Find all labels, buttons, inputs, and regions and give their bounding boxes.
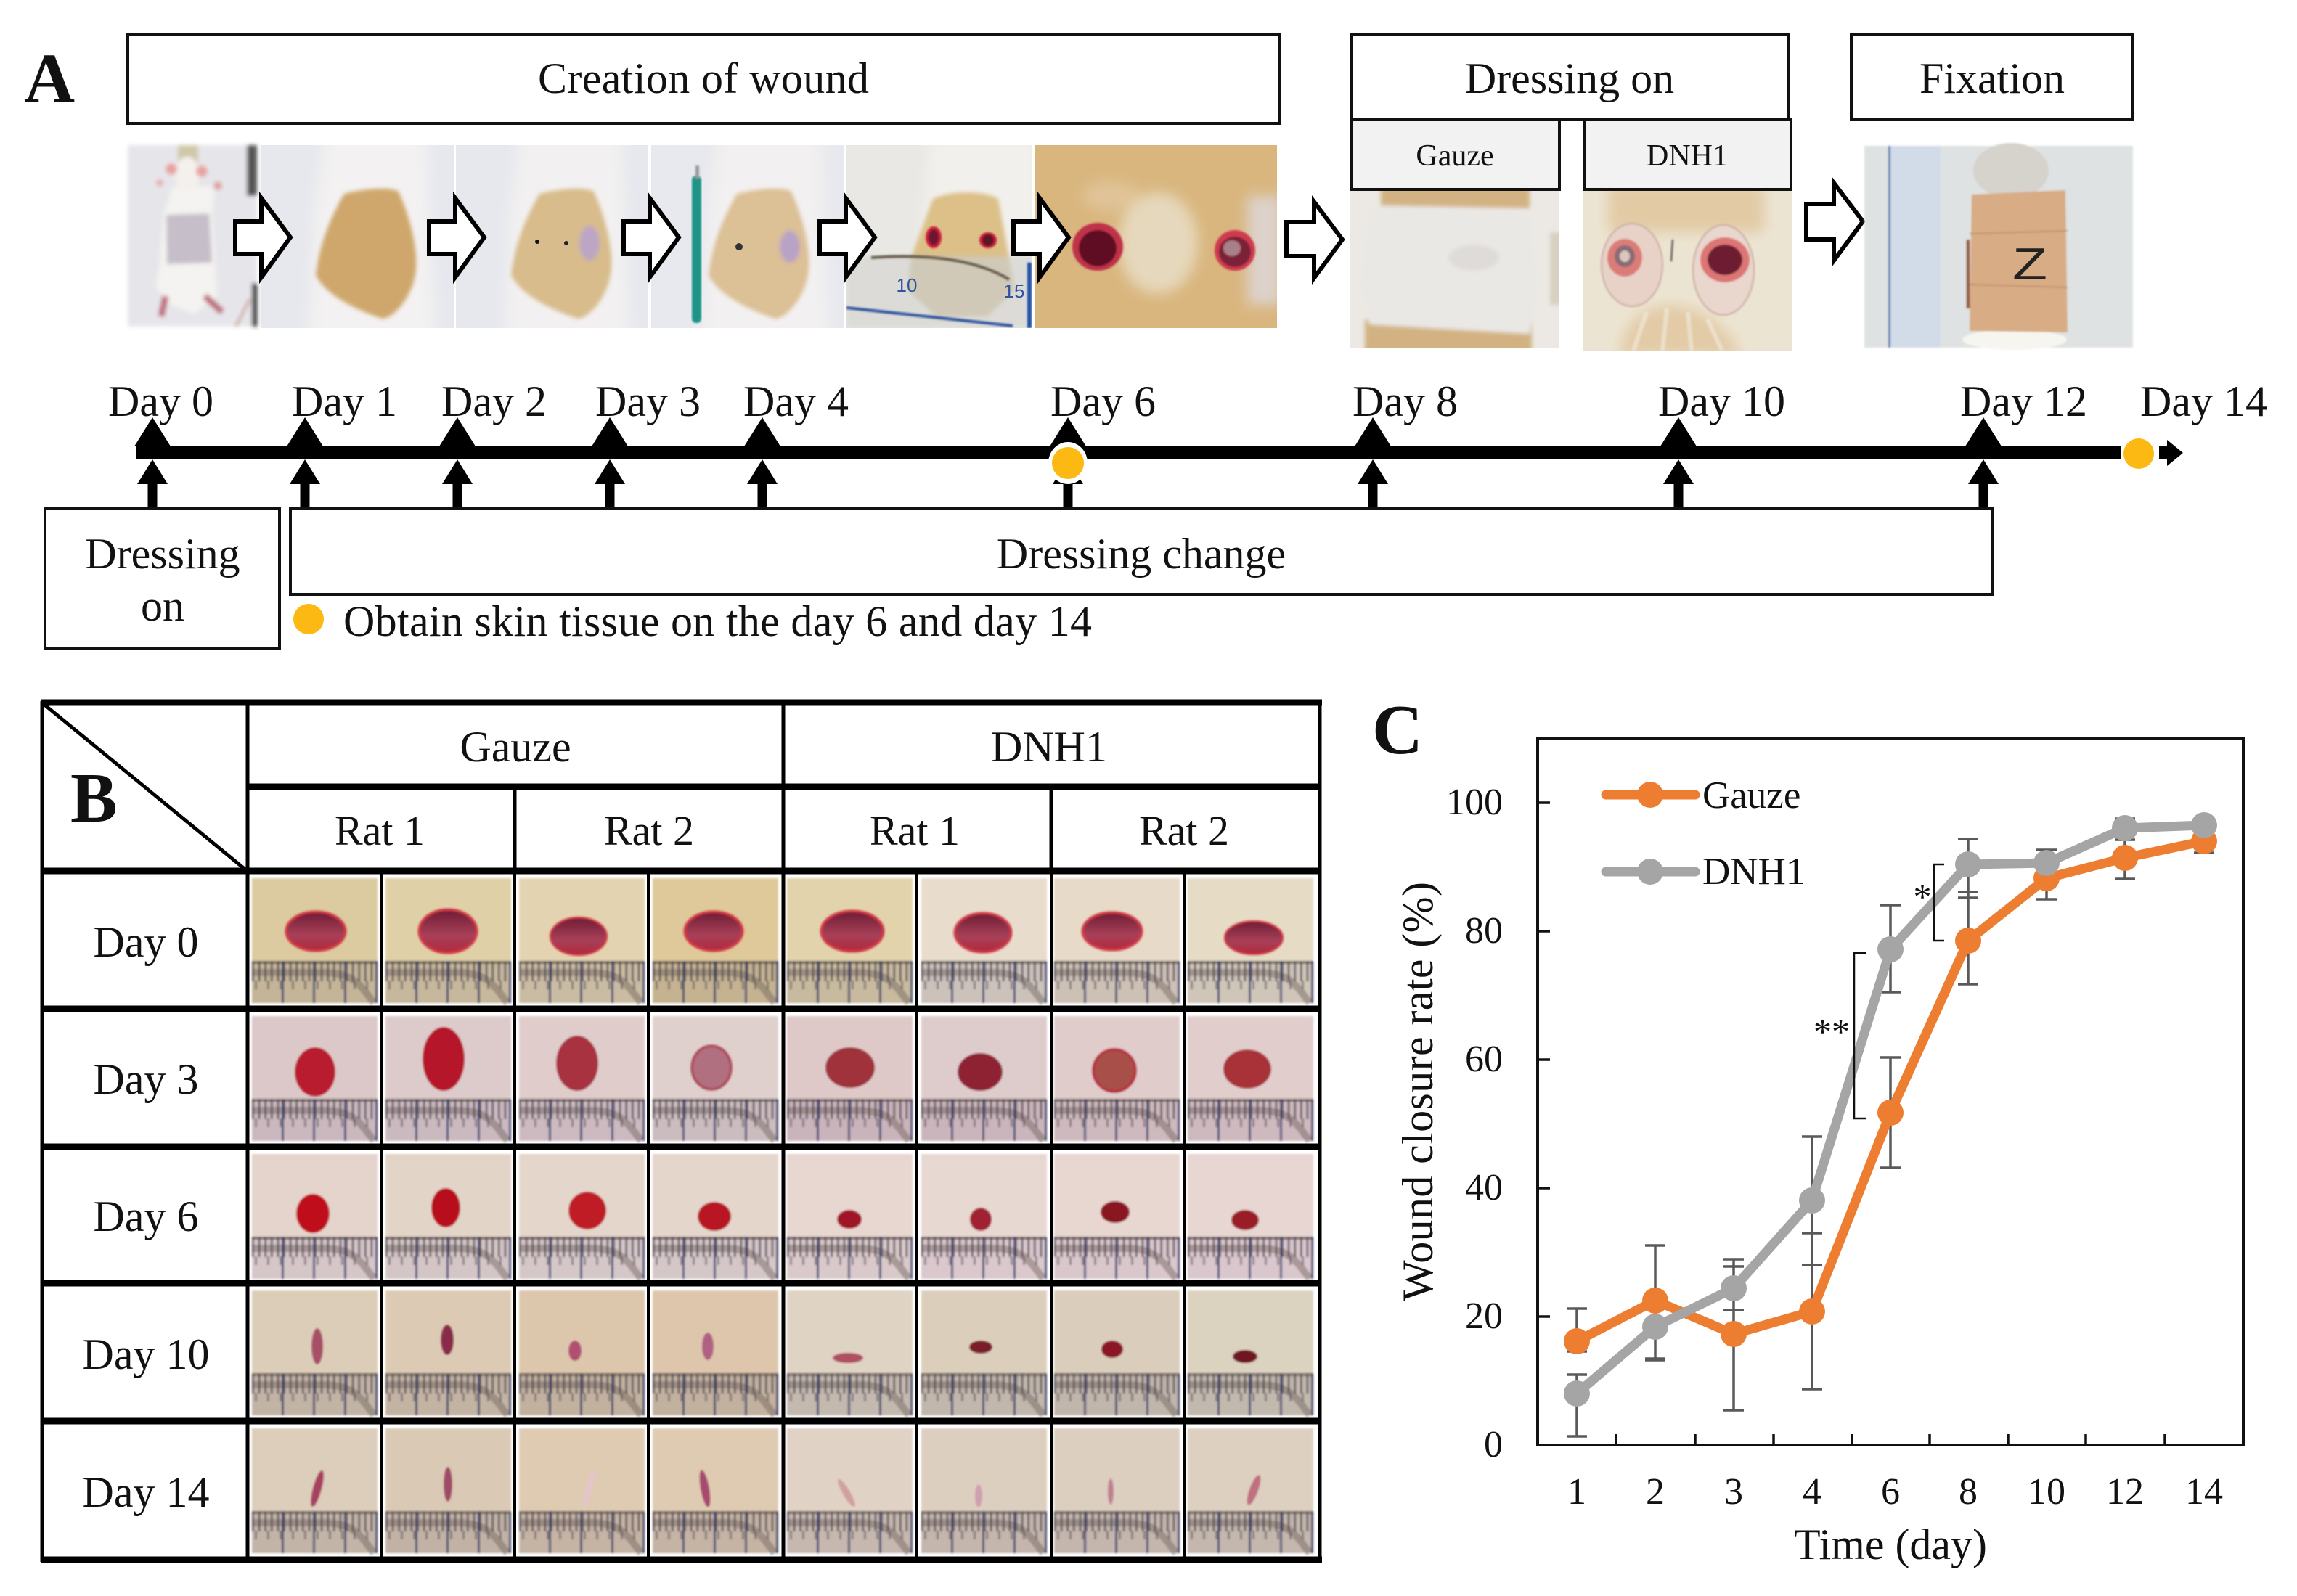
photo: Gauze Rat 2 right Day 14: [653, 1428, 778, 1553]
series: DNH1: [1564, 812, 2217, 1407]
photo: Gauze Rat 2 right Day 10: [653, 1290, 778, 1415]
photos: row Day 6: [252, 1154, 1313, 1279]
x axis labels: 14: [2185, 1471, 2223, 1513]
photo: DNH1 Rat 2 left Day 0: [1054, 878, 1180, 1003]
photo: DNH1 Rat 2 left Day 6: [1054, 1154, 1180, 1279]
panel: C wound closure line chart: [1372, 691, 2243, 1568]
photo: DNH1 Rat 2 right Day 14: [1188, 1428, 1313, 1553]
x axis labels: [1567, 1471, 2223, 1513]
panel: B wound photo table: [41, 701, 1322, 1562]
table header: rats: [335, 807, 1229, 854]
sub heading: DNH1: [1584, 120, 1791, 189]
photos: row Day 3: [252, 1016, 1313, 1141]
photo: Gauze Rat 2 right Day 3: [653, 1016, 778, 1141]
photo: DNH1 Rat 2 right Day 0: [1188, 878, 1313, 1003]
legend: tissue collection: Obtain skin tissue on the day 6 and day 14: [343, 597, 1092, 645]
timeline day labels: [108, 377, 2267, 425]
photo: biopsy punch on marked back: [651, 145, 844, 328]
photo: fixation bandage: [1864, 143, 2133, 350]
photo: Gauze Rat 2 right Day 6: [653, 1154, 778, 1279]
photo: wounds measured with ruler: [846, 138, 1038, 328]
photos: row Day 14: [252, 1428, 1313, 1553]
significance bracket: *: [1914, 864, 1944, 941]
photo: Gauze Rat 2 left Day 10: [519, 1290, 645, 1415]
sub heading: DNH1: DNH1: [1647, 139, 1728, 173]
table header: rats: Rat 1: [870, 807, 960, 854]
photo: DNH1 Rat 2 right Day 6: [1188, 1154, 1313, 1279]
x axis labels: 12: [2106, 1471, 2144, 1513]
photo: Gauze Rat 1 left Day 0: [252, 878, 378, 1003]
x axis labels: 1: [1567, 1471, 1586, 1513]
panel label C: C: [1372, 691, 1423, 769]
photo: Gauze Rat 1 right Day 14: [385, 1428, 511, 1553]
sub heading: Gauze: [1351, 120, 1559, 189]
photo: Gauze Rat 1 left Day 6: [252, 1154, 378, 1279]
photo: DNH1 Rat 1 left Day 10: [787, 1290, 913, 1415]
photo: rat before shaving: [128, 145, 257, 327]
photo: Gauze Rat 2 left Day 0: [519, 878, 645, 1003]
photo: Gauze Rat 2 left Day 3: [519, 1016, 645, 1141]
y axis labels: 60: [1465, 1039, 1503, 1080]
significance bracket: *: *: [1914, 876, 1931, 917]
x axis title: Time (day): [1794, 1521, 1987, 1568]
table row labels: Day 3: [94, 1055, 198, 1103]
photo: DNH1 Rat 2 left Day 10: [1054, 1290, 1180, 1415]
y axis labels: [1446, 782, 1503, 1465]
table row labels: Day 14: [83, 1468, 209, 1516]
table header: groups: Gauze: [460, 723, 571, 771]
photo: Gauze Rat 2 right Day 0: [653, 878, 778, 1003]
box: Dressing change: Dressing change: [997, 530, 1286, 578]
table row labels: [83, 918, 209, 1516]
y axis labels: 100: [1446, 782, 1503, 823]
photo: shaved back with depilation: [261, 145, 454, 328]
timeline day labels: Day 1: [292, 377, 397, 425]
marker: tissue collection day 14: [2123, 438, 2154, 469]
y axis labels: 40: [1465, 1167, 1503, 1208]
error bars: [1567, 819, 2214, 1436]
timeline day labels: Day 3: [595, 377, 701, 425]
panel label B: B: [70, 759, 118, 837]
photos: row Day 10: [252, 1290, 1313, 1415]
legend: Gauze: [1606, 774, 1800, 817]
box: Dressing change: [290, 509, 1992, 594]
photo: DNH1 Rat 2 left Day 14: [1054, 1428, 1180, 1553]
photo: DNH1 Rat 1 right Day 6: [921, 1154, 1047, 1279]
timeline day labels: Day 4: [743, 377, 849, 425]
photo: close-up of two wounds: [1035, 145, 1281, 328]
table header: rats: Rat 1: [335, 807, 425, 854]
photo: Gauze Rat 1 right Day 10: [385, 1290, 511, 1415]
x axis labels: 10: [2028, 1471, 2065, 1513]
photo: marked back: [456, 145, 648, 328]
heading: Dressing on: [1351, 34, 1789, 120]
x axis labels: 4: [1803, 1471, 1821, 1513]
heading: Dressing on: Dressing on: [1465, 54, 1674, 102]
photo: wounds measured with ruler: 10: [897, 274, 917, 296]
timeline day labels: Day 14: [2140, 377, 2267, 425]
panel label A: A: [24, 40, 75, 118]
photo: DNH1 Rat 1 left Day 0: [787, 878, 913, 1003]
photo: gauze dressing: [1350, 185, 1563, 352]
table row labels: Day 0: [94, 918, 198, 966]
table grid lines: [41, 701, 1322, 1562]
heading: Fixation: [1851, 34, 2132, 120]
table row labels: Day 6: [94, 1192, 198, 1240]
photo: DNH1 Rat 1 right Day 10: [921, 1290, 1047, 1415]
timeline day labels: Day 12: [1960, 377, 2087, 425]
timeline day labels: Day 10: [1658, 377, 1785, 425]
photo: Gauze Rat 2 left Day 6: [519, 1154, 645, 1279]
photo: Gauze Rat 2 left Day 14: [519, 1428, 645, 1553]
table header: groups: DNH1: [991, 723, 1107, 771]
timeline day labels: Day 2: [441, 377, 547, 425]
x axis labels: 2: [1646, 1471, 1665, 1513]
plot frame and ticks: [1538, 739, 2243, 1445]
marker: tissue collection day 6: [1048, 442, 1088, 484]
photo: Gauze Rat 1 left Day 14: [252, 1428, 378, 1553]
legend: Gauze: Gauze: [1702, 774, 1800, 817]
x axis labels: 6: [1881, 1471, 1900, 1513]
photo: Gauze Rat 1 right Day 0: [385, 878, 511, 1003]
timeline day labels: Day 0: [108, 377, 213, 425]
photo: DNH1 Rat 1 right Day 14: [921, 1428, 1047, 1553]
heading: Creation of wound: Creation of wound: [538, 54, 869, 102]
legend: DNH1: DNH1: [1702, 851, 1805, 893]
photo: DNH1 Rat 1 right Day 0: [921, 878, 1047, 1003]
arrows between wound creation photos: [235, 183, 1863, 278]
table header: rats: Rat 2: [1139, 807, 1229, 854]
x axis labels: 8: [1959, 1471, 1978, 1513]
photo: DNH1 hydrogel dressing: [1583, 185, 1792, 356]
y axis labels: 80: [1465, 910, 1503, 952]
y axis labels: 20: [1465, 1296, 1503, 1337]
x axis labels: 3: [1724, 1471, 1743, 1513]
photo: Gauze Rat 1 left Day 10: [252, 1290, 378, 1415]
heading: Fixation: Fixation: [1919, 54, 2065, 102]
y axis title: Wound closure rate (%): [1394, 882, 1442, 1301]
photo: DNH1 Rat 2 right Day 10: [1188, 1290, 1313, 1415]
box: Dressing on: on: [141, 582, 184, 630]
heading: Creation of wound: [128, 34, 1279, 123]
photo: DNH1 Rat 1 left Day 3: [787, 1016, 913, 1141]
photo: DNH1 Rat 1 left Day 6: [787, 1154, 913, 1279]
y axis labels: 0: [1484, 1424, 1503, 1465]
box: Dressing on: Dressing: [85, 530, 240, 578]
photo: Gauze Rat 1 right Day 3: [385, 1016, 511, 1141]
photos: row Day 0: [252, 878, 1313, 1003]
photo: wounds measured with ruler: 15: [1004, 280, 1024, 302]
significance bracket: **: [1813, 953, 1866, 1118]
photo: DNH1 Rat 2 right Day 3: [1188, 1016, 1313, 1141]
photo: DNH1 Rat 1 left Day 14: [787, 1428, 913, 1553]
panel: A experimental timeline: [24, 34, 2267, 649]
box: Dressing on: [45, 509, 280, 649]
photo: DNH1 Rat 1 right Day 3: [921, 1016, 1047, 1141]
photo: fixation bandage: Z: [2012, 240, 2047, 290]
timeline day labels: Day 8: [1353, 377, 1458, 425]
series: Gauze: [1564, 828, 2217, 1354]
timeline day labels: Day 6: [1050, 377, 1156, 425]
photo: Gauze Rat 1 right Day 6: [385, 1154, 511, 1279]
timeline axis with day markers: [134, 417, 2183, 509]
legend: DNH1: [1606, 851, 1805, 893]
photo: Gauze Rat 1 left Day 3: [252, 1016, 378, 1141]
table header: groups: [460, 723, 1107, 771]
table row labels: Day 10: [83, 1330, 209, 1378]
table header: rats: Rat 2: [604, 807, 694, 854]
sub heading: Gauze: Gauze: [1416, 139, 1494, 173]
photo: DNH1 Rat 2 left Day 3: [1054, 1016, 1180, 1141]
significance bracket: **: **: [1813, 1011, 1850, 1052]
